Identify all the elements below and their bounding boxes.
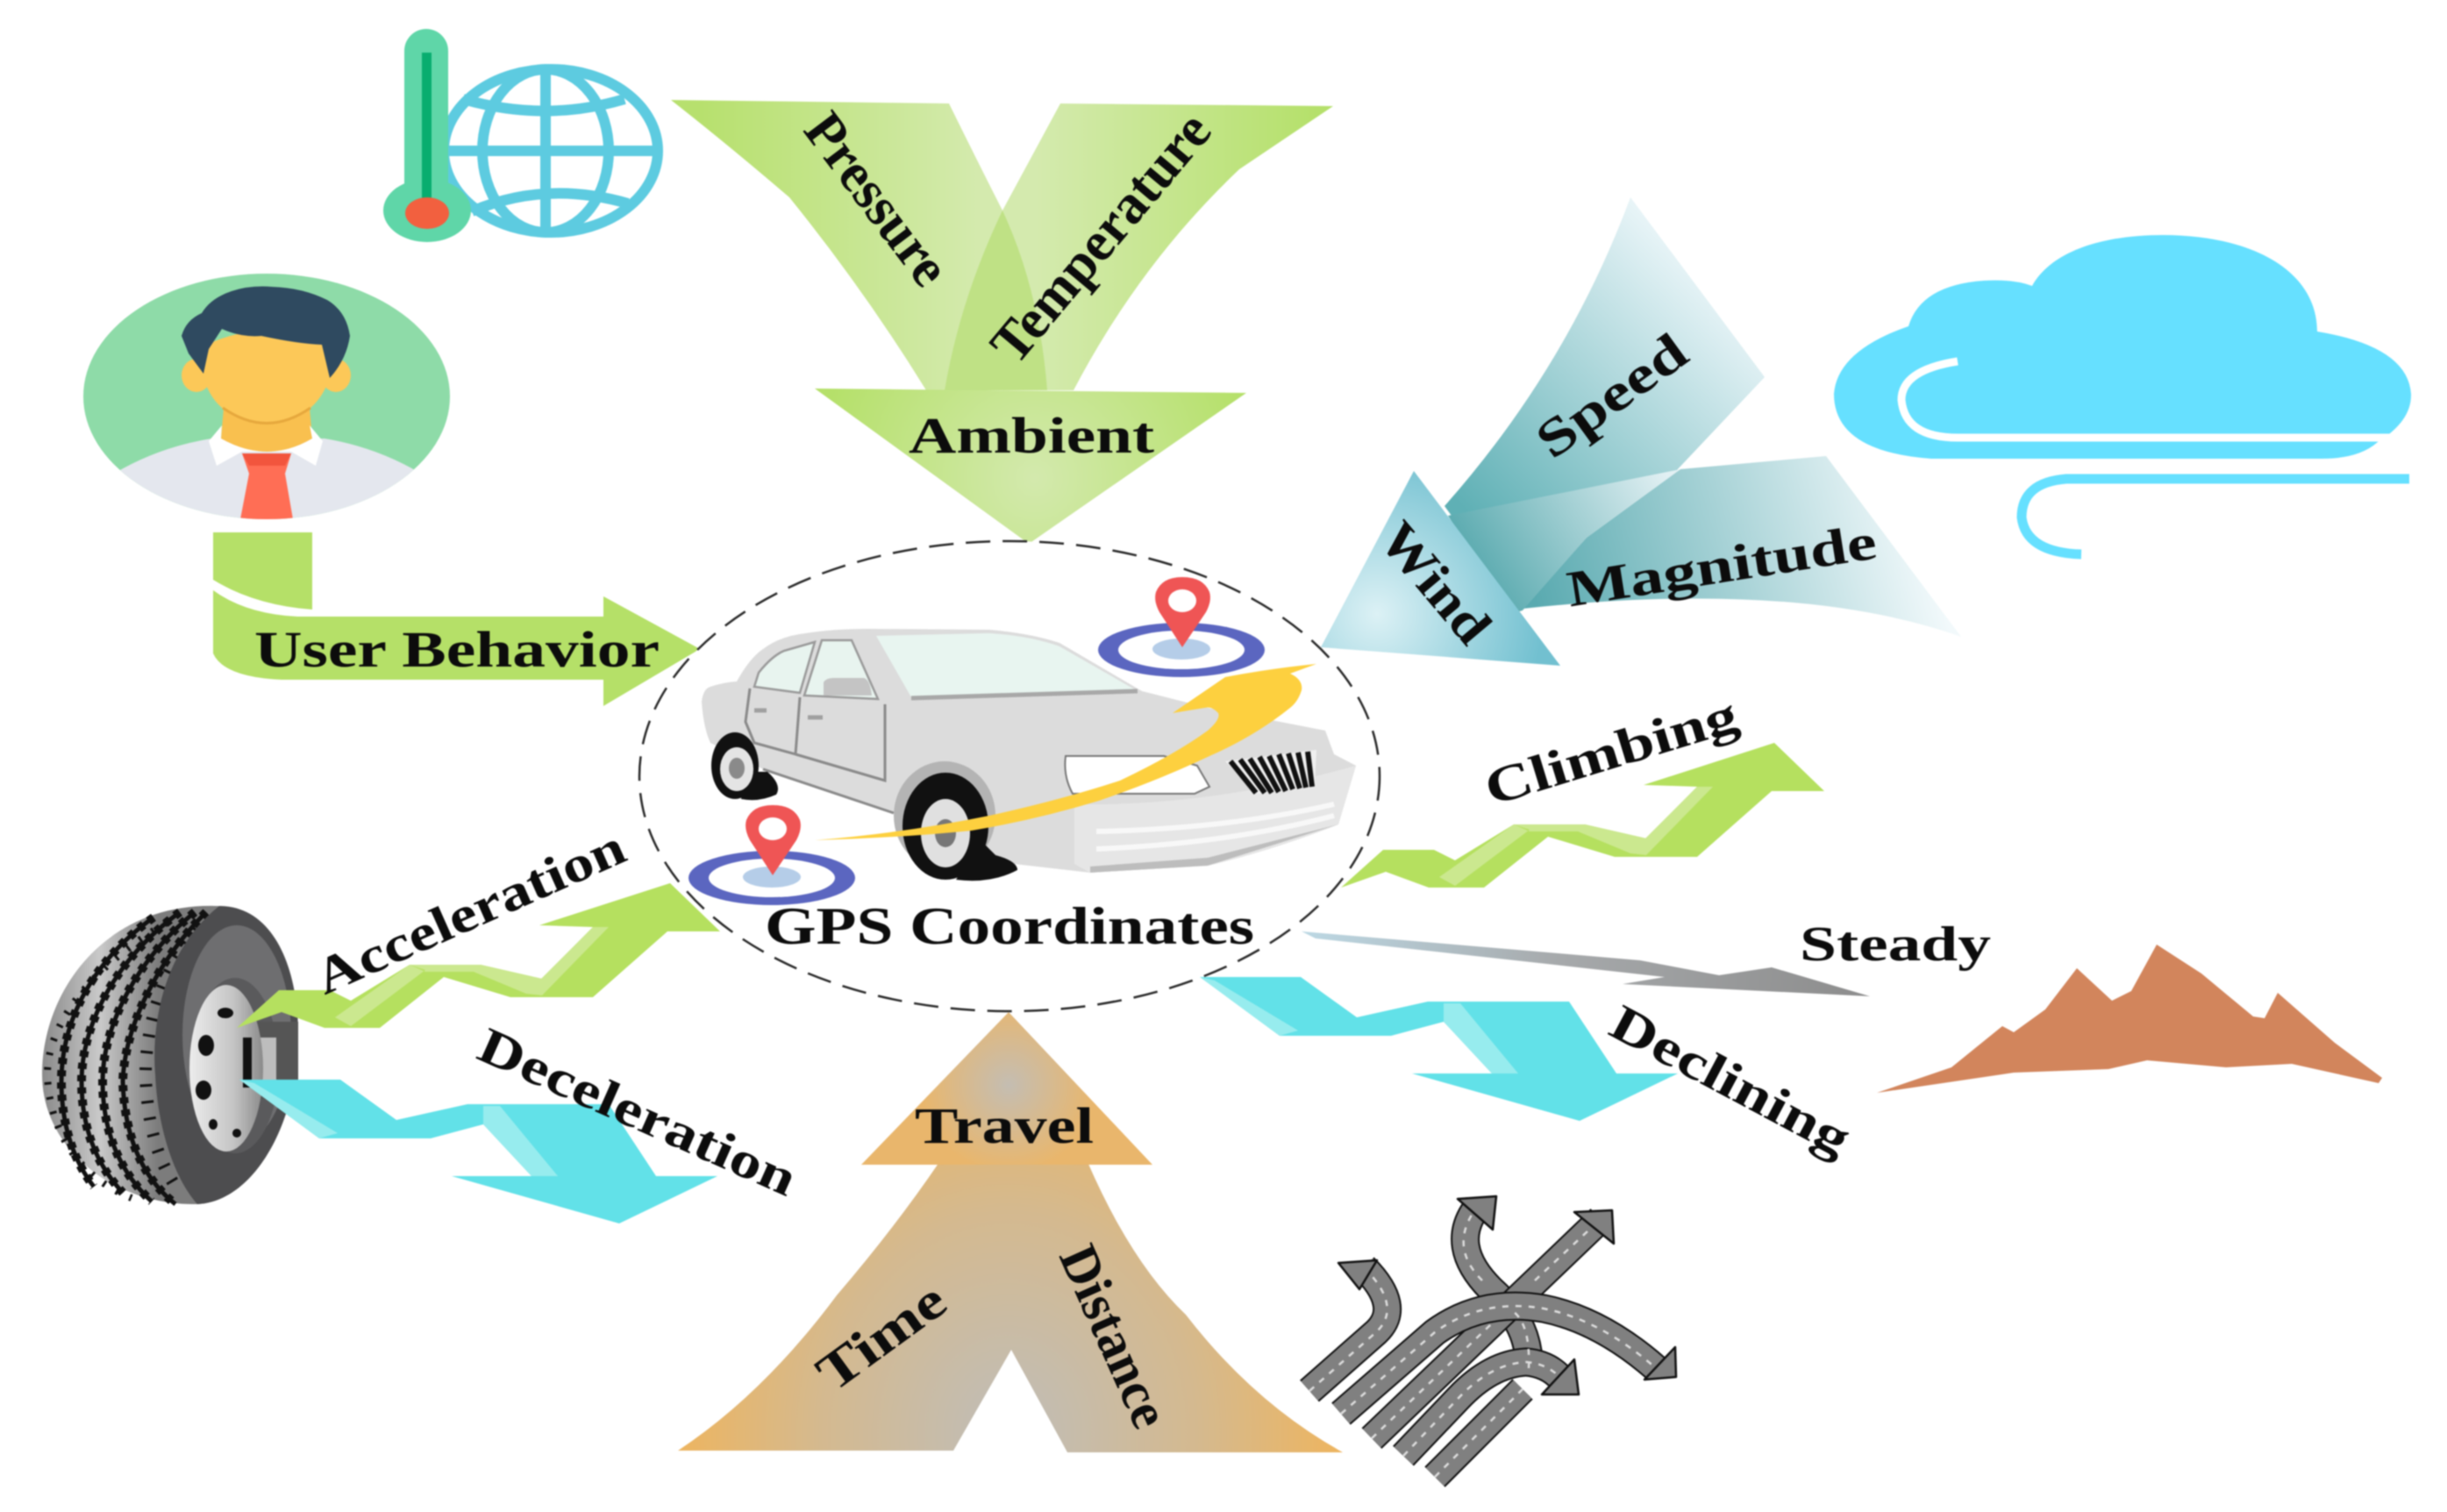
icon: thermometer [383,29,471,242]
icon: car [702,629,1356,881]
arrow head [815,389,1246,544]
sidewall [154,906,298,1204]
label: Temperature: Temperature [978,100,1223,375]
icon: roads [1309,1196,1676,1477]
arrow heads [1338,1196,1676,1394]
front wheel [894,761,1017,881]
icon: location pin bottom [688,805,855,905]
body [678,1162,1343,1452]
bolts [196,1008,241,1138]
road behind [1466,1206,1529,1368]
label: Travel: Travel [915,1097,1094,1154]
icon: tire [42,906,298,1204]
label: Declining: Declining [1602,993,1860,1167]
label: Distance: Distance [1047,1237,1181,1437]
label: Time: Time [806,1271,957,1402]
panel: user behavior arrow [213,532,700,706]
arrow: climbing [1341,743,1824,888]
bumper [1074,766,1356,873]
door handles [754,710,823,717]
headlight [1065,756,1209,794]
central dashed circle [639,541,1380,1011]
label: Steady: Steady [1800,917,1991,972]
hair [182,287,350,378]
panel: travel [678,1012,1343,1452]
icon: mountain [1877,945,2382,1093]
panel: ambient [671,100,1333,544]
road looping [1403,1362,1561,1456]
panel: wind [1321,197,1961,666]
tie [240,453,293,519]
seat [824,678,872,695]
label: Climbing: Climbing [1478,686,1744,817]
shirt [119,438,414,518]
wind triangle [1321,471,1560,666]
icon: thermometer and globe [383,29,658,242]
bumper shadow [1090,824,1338,873]
road arcing right [1341,1306,1656,1414]
label: Speed: Speed [1525,322,1698,469]
icon: globe [444,68,658,233]
left wedge [671,100,1047,390]
label: Ambient: Ambient [909,407,1155,464]
head [861,1012,1152,1165]
icon: user portrait [83,274,450,526]
label: Magnitude: Magnitude [1563,513,1880,617]
label: Pressure: Pressure [792,100,962,297]
label: Deceleration: Deceleration [470,1016,806,1208]
tire outline with tread [42,906,298,1204]
tread grooves [47,912,206,1204]
arrow: declining [1200,977,1678,1121]
collar [209,425,323,466]
label: Acceleration: Acceleration [306,818,634,1006]
arrow: steady [1302,931,1870,996]
lane markings [1309,1206,1656,1477]
wedge overlap [945,210,1047,390]
middle wing [1448,469,1680,614]
magnitude wing [1523,456,1961,637]
icon: cloud [1834,235,2411,554]
arrow: deceleration [239,1080,717,1223]
right wedge [945,103,1333,390]
arrow: acceleration [237,883,720,1028]
side windows [754,642,815,693]
icon: location pin top [1098,577,1265,677]
rear wheel [711,732,778,800]
face [182,332,351,424]
label: Wind: Wind [1368,510,1502,655]
car body [702,629,1356,873]
neck [221,408,312,452]
rim [189,985,263,1152]
doors [746,688,894,813]
hub right part [252,1022,298,1099]
speed wing [1445,197,1765,516]
yellow route arrow [815,664,1316,840]
label: User Behavior: User Behavior [254,621,660,678]
windshield [876,633,1138,697]
grille [1225,750,1316,794]
label: GPS Coordinates: GPS Coordinates [765,897,1254,955]
